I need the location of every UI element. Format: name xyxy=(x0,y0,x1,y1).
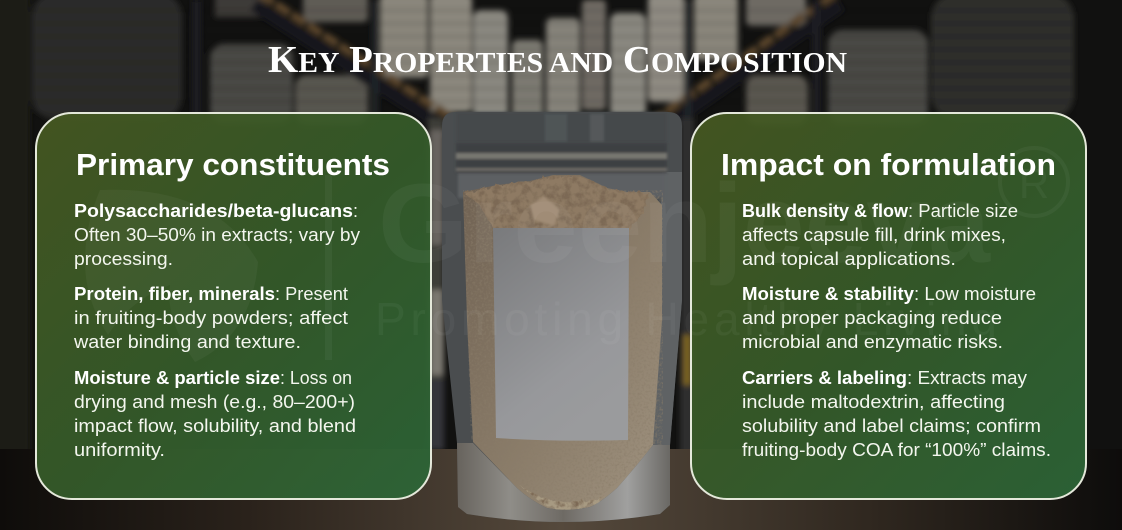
item: carriers and labeling: Carriers & labeling xyxy=(742,368,907,388)
watermark divider xyxy=(325,175,332,360)
watermark leaf logo xyxy=(85,190,258,362)
watermark registered mark: R xyxy=(1019,160,1049,207)
item: moisture and stability: microbial and enzymatic risks. xyxy=(742,332,1003,352)
item: bulk density and flow: and topical applications. xyxy=(742,249,956,269)
heading: Impact on formulation xyxy=(721,147,1056,182)
item: polysaccharides: Often 30–50% in extracts; vary by xyxy=(74,225,360,245)
panel: impact on formulation xyxy=(691,113,1086,499)
zipper strip xyxy=(456,143,667,173)
item: moisture and stability: : Low moisture xyxy=(914,284,1036,304)
faint brand watermark xyxy=(85,148,1068,362)
title: KEY PROPERTIES AND COMPOSITION xyxy=(268,39,847,81)
item: moisture and particle size: drying and mesh (e.g., 80–200+) xyxy=(74,392,355,412)
pouch body xyxy=(442,112,682,522)
item: polysaccharides: : xyxy=(353,201,358,221)
item: protein, fiber, minerals: in fruiting-body powders; affect xyxy=(74,308,348,328)
item: protein, fiber, minerals xyxy=(73,284,348,352)
pouch right seam highlight xyxy=(653,172,682,445)
item: protein, fiber, minerals: Protein, fiber, minerals xyxy=(74,284,275,304)
pouch top clear section xyxy=(456,112,667,198)
item: moisture and particle size: uniformity. xyxy=(74,440,165,460)
watermark registered mark xyxy=(1000,148,1068,216)
item: bulk density and flow: : Particle size xyxy=(908,201,1018,221)
watermark wordmark: jeeva xyxy=(710,161,991,286)
item: moisture and stability xyxy=(742,284,1036,352)
item: bulk density and flow: affects capsule fill, drink mixes, xyxy=(742,225,1006,245)
silver bottom gusset xyxy=(457,443,670,522)
watermark wordmark xyxy=(378,161,991,286)
item: polysaccharides: Polysaccharides/beta-glucans xyxy=(74,201,353,221)
item: carriers and labeling: fruiting-body COA for “100%” claims. xyxy=(742,440,1051,460)
item: moisture and stability: and proper packaging reduce xyxy=(742,308,1002,328)
pouch of mushroom powder xyxy=(442,112,682,522)
item: moisture and particle size: : Loss on xyxy=(280,368,352,388)
item: protein, fiber, minerals: : Present xyxy=(275,284,348,304)
item: polysaccharides: processing. xyxy=(74,249,173,269)
panel: primary constituents xyxy=(36,113,431,499)
item: moisture and particle size: Moisture & particle size xyxy=(74,368,280,388)
panel background xyxy=(691,113,1086,499)
watermark wordmark: Green xyxy=(378,161,713,286)
item: carriers and labeling xyxy=(742,368,1051,460)
item: moisture and particle size: impact flow, solubility, and blend xyxy=(74,416,356,436)
item: moisture and stability: Moisture & stability xyxy=(742,284,914,304)
item: protein, fiber, minerals: water binding and texture. xyxy=(73,332,301,352)
heading: Primary constituents xyxy=(76,147,390,182)
blank white label xyxy=(493,228,629,441)
item: carriers and labeling: : Extracts may xyxy=(907,368,1027,388)
item: carriers and labeling: solubility and label claims; confirm xyxy=(742,416,1041,436)
item: polysaccharides xyxy=(74,201,360,269)
item: moisture and particle size xyxy=(74,368,356,460)
powder fill xyxy=(463,175,663,510)
watermark tagline: Promoting Healthy Living xyxy=(375,293,997,345)
item: carriers and labeling: include maltodextrin, affecting xyxy=(742,392,1005,412)
panel background xyxy=(36,113,431,499)
item: bulk density and flow: Bulk density & flow xyxy=(742,201,909,221)
item: bulk density and flow xyxy=(742,201,1018,269)
